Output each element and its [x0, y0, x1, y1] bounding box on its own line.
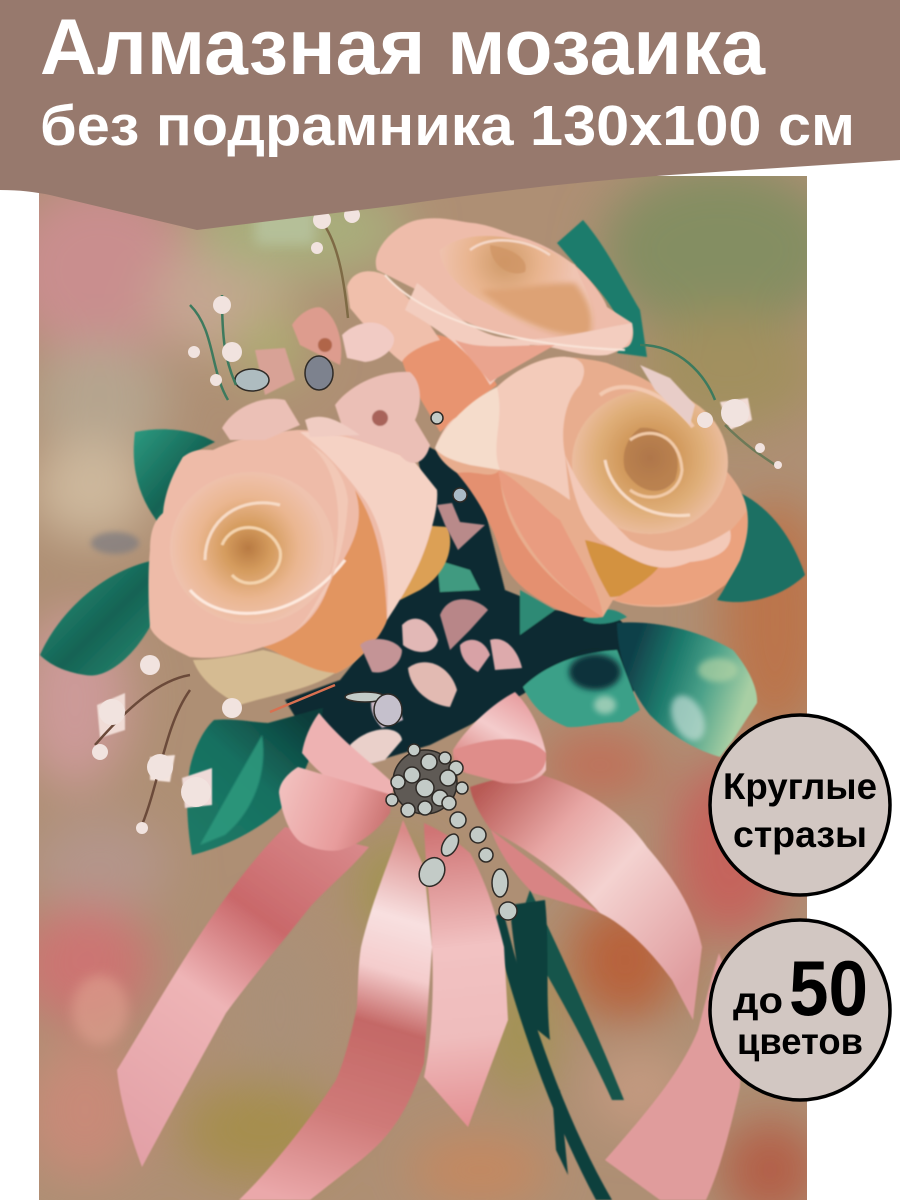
tiny blossoms [92, 207, 782, 834]
title [40, 2, 855, 158]
bottom right petal [613, 510, 748, 605]
pale front petals [435, 357, 584, 500]
leaves [40, 220, 805, 1200]
cream under-petal [193, 650, 335, 705]
badge: up to 50 colors: цветов [737, 1021, 863, 1062]
rose: left [148, 430, 450, 705]
badge: up to 50 colors [710, 920, 890, 1100]
leaf: lower middle [523, 650, 640, 727]
thin flower stems [95, 222, 780, 825]
left outer petal [347, 271, 440, 362]
center [451, 236, 579, 314]
badge: round rhinestones: стразы [733, 814, 867, 855]
ribbon tail: far left [117, 827, 369, 1167]
lower body [395, 334, 497, 432]
dark foliage behind roses [285, 440, 650, 775]
ribbon tail: center right [424, 823, 508, 1127]
leaf: upper left [134, 429, 215, 525]
rose core [183, 483, 313, 611]
lower front petal [405, 283, 633, 385]
right pale petal [300, 432, 437, 620]
lower left orange petal [457, 470, 603, 618]
outer shape [435, 357, 748, 618]
bow loop: upper left [302, 713, 395, 800]
badge: round rhinestones: Круглые [723, 766, 877, 807]
title line 2: без подрамника 130х100 см [40, 94, 855, 158]
ribbon tail: center left [239, 820, 432, 1200]
rose core [572, 390, 728, 534]
bow loop: right [453, 692, 546, 783]
leaf: lower right large [617, 622, 757, 757]
leaf: right [717, 493, 805, 602]
badge: up to 50 colors: до [733, 980, 783, 1021]
rose: top [347, 218, 633, 432]
ribbon tail: right [470, 775, 702, 1020]
outer shape [148, 430, 437, 675]
badge: round rhinestones [710, 715, 890, 895]
leaf: top [557, 220, 647, 357]
bow loop: left [279, 767, 392, 851]
header banner [0, 0, 900, 230]
ribbon bow [117, 692, 740, 1200]
rose: right [435, 357, 748, 618]
yellow-orange shadow [585, 540, 665, 597]
ribbon tail: right lower [605, 953, 740, 1200]
badge: up to 50 colors: 50 [789, 944, 868, 1032]
small pink flowers [97, 307, 752, 808]
title line 1: Алмазная мозаика [40, 2, 766, 91]
stems below the brooch [492, 890, 624, 1200]
leaf: far left [40, 560, 156, 676]
ribbon fold under right tail [491, 830, 600, 913]
brooch with crystals [235, 356, 517, 920]
upper petals [376, 218, 633, 355]
orange petal behind [400, 525, 450, 600]
orange lower petal [263, 490, 387, 675]
leaf: lower left [187, 708, 323, 855]
